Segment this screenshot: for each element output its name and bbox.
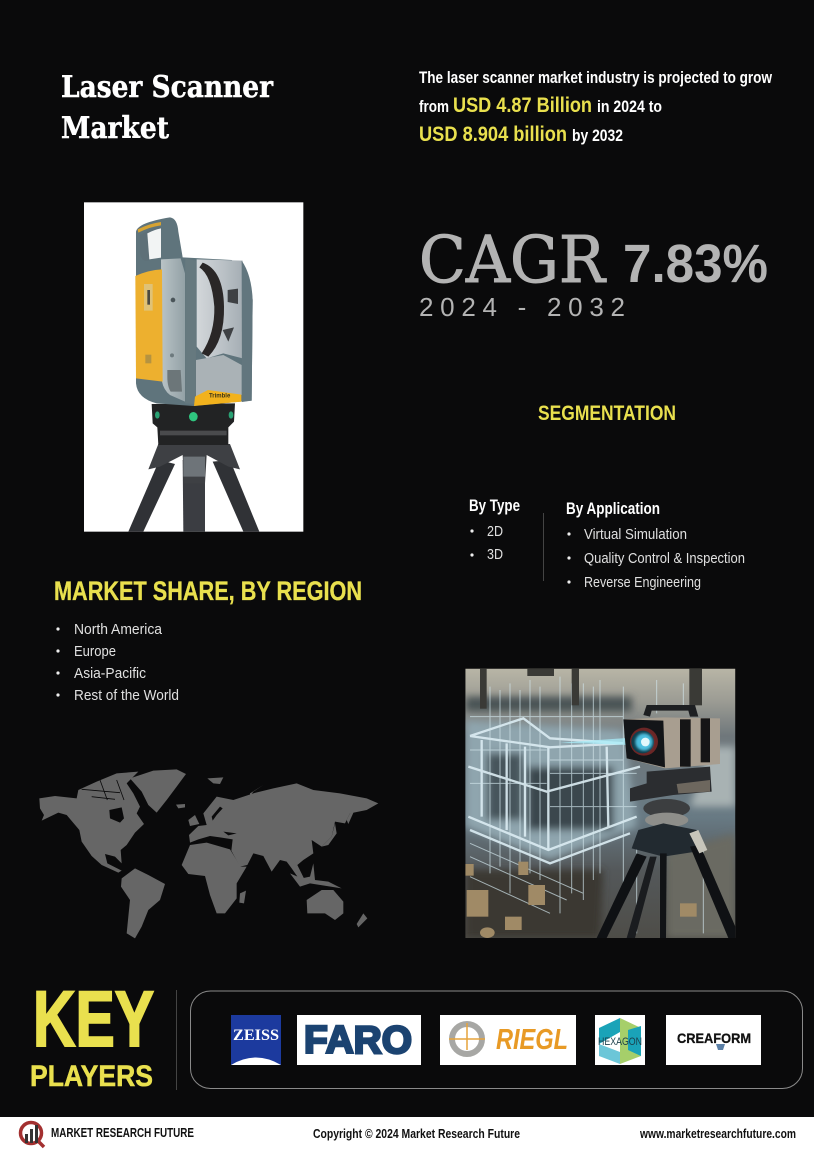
laser beam <box>561 738 626 745</box>
logo: RIEGL <box>440 1015 576 1065</box>
segmentation: by type: By Type <box>469 497 520 515</box>
image: laser scanning a construction site <box>465 669 735 938</box>
region list: Europe <box>74 643 116 660</box>
logo: RIEGL: RIEGL <box>496 1024 568 1056</box>
region list: Asia-Pacific <box>74 665 146 682</box>
segmentation: by application: By Application <box>566 500 660 518</box>
region list: Rest of the World <box>74 687 179 704</box>
market share heading: MARKET SHARE, BY REGION <box>54 576 362 606</box>
scanner body <box>135 217 253 406</box>
market projection text: USD 4.87 Billion <box>453 94 592 117</box>
logo: Zeiss: ZEISS <box>233 1027 279 1044</box>
CAGR figure: CAGR <box>419 223 607 298</box>
title: Market <box>61 111 169 146</box>
scanner body: Trimble <box>209 394 231 400</box>
logo: Creaform <box>666 1015 761 1065</box>
title: Laser Scanner <box>61 70 274 105</box>
world map <box>39 769 378 938</box>
segmentation: by application: Virtual Simulation <box>584 526 687 543</box>
camera head <box>623 705 720 768</box>
footer brand name: MARKET RESEARCH FUTURE <box>51 1126 194 1140</box>
market projection text: by 2032 <box>572 127 623 145</box>
CAGR figure <box>419 223 768 322</box>
key players heading <box>30 974 154 1093</box>
segmentation: by type: 3D <box>487 546 503 563</box>
logo: Hexagon: HEXAGON <box>598 1036 642 1048</box>
CAGR figure: 7.83% <box>623 234 768 294</box>
logo: Zeiss <box>231 1015 281 1065</box>
key players logo panel <box>190 991 802 1088</box>
copyright: Copyright © 2024 Market Research Future <box>313 1127 520 1141</box>
title <box>61 70 274 146</box>
region list <box>56 621 179 704</box>
segmentation heading: SEGMENTATION <box>538 402 676 425</box>
market projection text: in 2024 to <box>597 98 662 116</box>
logo: Hexagon <box>595 1015 645 1065</box>
camera mount and tripod <box>597 767 735 938</box>
market projection text: from <box>419 98 449 116</box>
scanner base with LEDs <box>152 403 235 445</box>
segmentation: by application <box>566 500 745 591</box>
key players heading: KEY <box>33 974 154 1063</box>
market projection text <box>419 69 772 146</box>
region list: North America <box>74 621 163 638</box>
image: laser scanner on tripod <box>84 202 303 532</box>
tripod legs <box>128 444 259 532</box>
crane towers <box>480 669 702 709</box>
segmentation: by type <box>469 497 520 563</box>
wireframe building <box>468 718 640 863</box>
footer logo <box>20 1122 44 1147</box>
segmentation: by type: 2D <box>487 523 503 540</box>
segmentation: by application: Reverse Engineering <box>584 574 701 591</box>
logo: Creaform: CREAFORM <box>677 1030 751 1046</box>
footer <box>0 1117 814 1150</box>
key players heading: PLAYERS <box>30 1060 153 1093</box>
stacked materials <box>465 862 697 938</box>
market projection text: USD 8.904 billion <box>419 123 567 146</box>
CAGR figure: 2024 - 2032 <box>419 292 625 322</box>
segmentation: by application: Quality Control & Inspection <box>584 550 745 567</box>
logo: FARO: FARO <box>304 1019 412 1062</box>
